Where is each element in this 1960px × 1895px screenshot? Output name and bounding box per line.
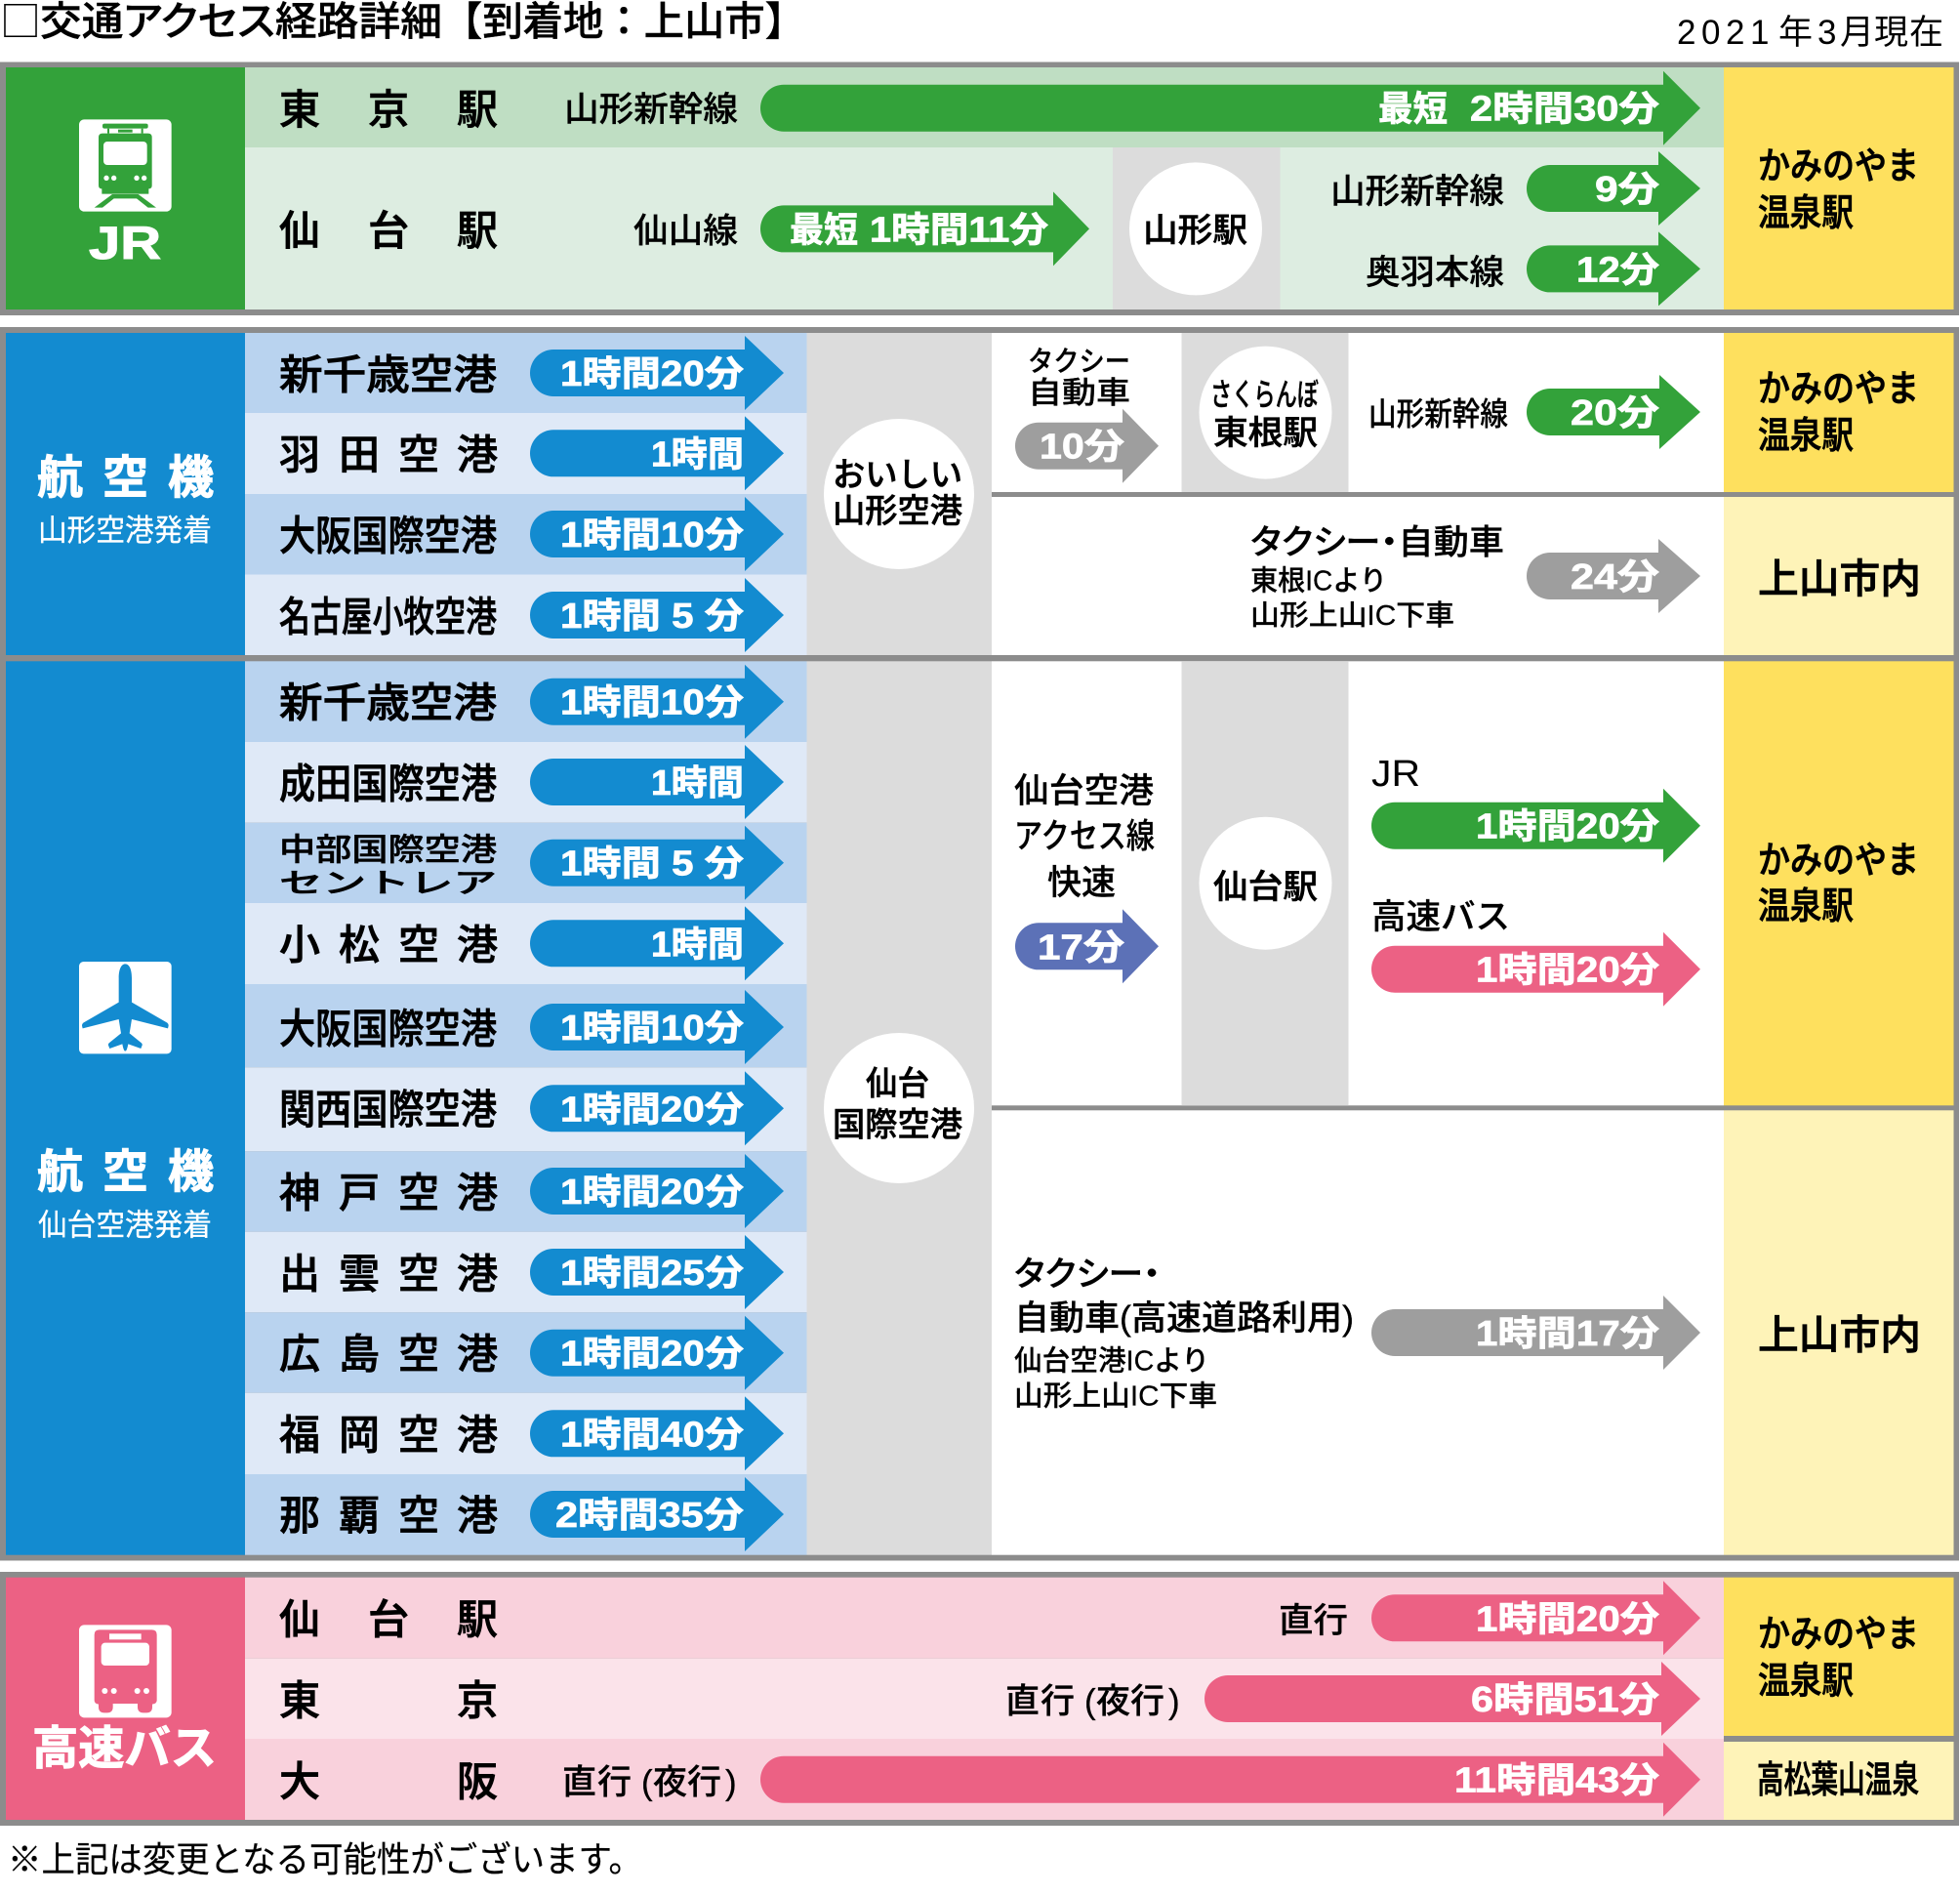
arrow: Tokyo 2h30: 最短 [1378,89,1448,129]
destination: Kaminoyama city: 上山市内 [1758,556,1921,601]
origin: Naha: 那覇空港 [279,1493,498,1539]
destination: Kaminoyama Onsen station [1758,1615,1919,1703]
arrow: 1h10 [530,497,784,571]
line: express bus: 高速バス [1371,898,1510,936]
destination cell: Kaminoyama Onsen [1724,661,1954,1105]
arrow: 12 min: 12分 [1576,249,1659,289]
arrow: 9 min: 9分 [1595,169,1659,209]
line: Senzan: 仙山線 [633,213,738,250]
destination: Kaminoyama Onsen station [1758,369,1919,457]
arrow: 1h40 [530,1396,784,1470]
arrow: 1h05: 1時間 5 分 [560,844,744,884]
arrow: 1h40: 1時間40分 [560,1414,744,1454]
arrow: 1h05 [530,578,784,652]
Yamagata station column [1113,147,1281,309]
arrow: 1h20: 1時間20分 [560,1172,744,1212]
service: direct overnight: 直行(夜行) [562,1763,737,1802]
arrow: 1h20 [530,1071,784,1145]
destination cell: Kaminoyama city [1724,497,1954,655]
origin: Sendai station: 仙台駅 [279,1597,498,1642]
origin: Chubu Centrair: セントレア [279,868,497,898]
arrow: 10 min [1015,409,1159,483]
arrow: 17 min: 17分 [1038,927,1124,967]
hub: Sakuranbo-Higashine station: さくらんぼ [1210,377,1319,412]
JR category block [6,67,245,309]
arrow: 1h17 [1371,1296,1700,1370]
arrow: Tokyo 2h30: 2時間30分 [1470,89,1659,129]
destination: Kaminoyama Onsen station [1758,841,1919,927]
destination: Kaminoyama Onsen station: 温泉駅 [1758,1662,1854,1703]
heading: air via Sendai: 航空機 [37,1146,214,1197]
row: Sendai [245,1578,1724,1659]
destination: Kaminoyama Onsen station: 温泉駅 [1758,416,1854,457]
arrow: 1h10: 1時間10分 [560,682,744,722]
destination cell: Kaminoyama Onsen [1724,1578,1954,1736]
route: taxi expressway [1014,1256,1354,1412]
row: Tokyo station [245,67,1724,147]
bus category block [6,1578,245,1820]
hub: Sakuranbo-Higashine station [1199,347,1331,479]
origin: Izumo: 出雲空港 [279,1252,498,1297]
hub: Sendai international airport: 国際空港 [833,1107,962,1144]
line: Yamagata Shinkansen: 山形新幹線 [1368,396,1508,432]
destination: Kaminoyama Onsen station: かみのやま [1758,369,1919,410]
hub: Sendai station: 仙台駅 [1213,869,1318,906]
row: Sendai station [245,147,1724,309]
hub: Oishii Yamagata airport: 山形空港 [833,493,962,530]
arrow: 1h20 [530,1316,784,1390]
destination cell [1724,67,1954,309]
route: taxi via Higashine IC: 山形上山IC下車 [1250,599,1454,632]
arrow: 1h20: 1時間20分 [560,353,744,393]
arrow: 1h [530,416,784,490]
arrow: 1h10 [530,665,784,739]
route: taxi via Higashine IC: タクシー・自動車 [1250,523,1504,562]
origin: Osaka: 大阪 [279,1759,498,1804]
destination: Kaminoyama Onsen station: かみのやま [1758,1615,1919,1656]
hub: Yamagata station [1129,162,1262,295]
origin: Tokyo: 東京 [279,1677,498,1724]
origin: New Chitose: 新千歳空港 [279,680,497,726]
arrow: Sendai 1h11: 1時間11分 [870,209,1048,249]
arrow: JR 1h20 [1371,789,1700,863]
arrow: 1h10: 1時間10分 [560,515,744,555]
hub: Sendai station [1199,817,1331,950]
row: Tokyo [245,1659,1724,1739]
arrow: 1h20: 1時間20分 [1476,1598,1659,1638]
origin: Kobe: 神戸空港 [279,1170,498,1216]
arrow: bus 1h20: 1時間20分 [1476,950,1659,990]
service: direct: 直行 [1279,1602,1348,1640]
route: taxi expressway: 仙台空港ICより [1014,1345,1209,1377]
route: Sendai airport access line: 仙台空港 [1014,772,1154,810]
hub: Sakuranbo-Higashine station: 東根駅 [1213,415,1318,452]
arrow: Sendai 1h11 [760,191,1089,266]
origin: Kansai: 関西国際空港 [279,1087,497,1133]
arrow: 24 min [1527,539,1700,613]
heading: air via Yamagata: 山形空港発着 [38,514,212,548]
route: taxi via Higashine IC [1250,523,1504,632]
route: Sendai airport access line: アクセス線 [1014,818,1155,855]
panel: JR [0,62,1959,315]
route: taxi or car: 自動車 [1028,376,1130,410]
hub: Sendai international airport [824,1033,974,1183]
destination cell: Kaminoyama city [1724,1110,1954,1555]
origin: Nagoya Komaki: 名古屋小牧空港 [279,594,497,640]
destination: Kaminoyama Onsen station: かみのやま [1758,841,1919,882]
arrow: 2h35 [530,1477,784,1551]
hub: Yamagata station: 山形駅 [1143,213,1247,250]
arrow: 1h: 1時間 [651,762,744,803]
arrow: bus 1h20 [1371,932,1700,1007]
arrow: 1h: 1時間 [651,433,744,474]
arrow: 2h35: 2時間35分 [555,1495,744,1535]
route: taxi via Higashine IC: 東根ICより [1250,564,1387,597]
arrow: JR 1h20: 1時間20分 [1476,806,1659,846]
origin: Sendai station: 仙台駅 [279,208,498,254]
origin: Komatsu: 小松空港 [279,922,498,968]
title: 交通アクセス経路詳細 [40,0,442,44]
arrow: 1h17: 1時間17分 [1476,1313,1659,1353]
hub: Sendai international airport: 仙台 [866,1066,929,1103]
origin: Hiroshima: 広島空港 [279,1332,498,1377]
arrow: 1h10: 1時間10分 [560,1008,744,1048]
arrow: 12 min [1527,231,1700,306]
destination: Kaminoyama Onsen station: かみのやま [1758,146,1919,187]
arrow: 11h43 [760,1743,1700,1817]
panel: air and Yamagata/Sendai airports [0,327,1959,1560]
route: taxi expressway: 山形上山IC下車 [1014,1380,1217,1412]
origin: Chubu Centrair [279,832,497,898]
destination cell: Takamatsu Hayama Onsen [1724,1742,1954,1820]
arrow: 1h20 [530,336,784,410]
arrow: 1h20 [530,1154,784,1228]
arrow: Sendai 1h11: 最短 [790,209,858,249]
arrow: Tokyo 2h30 [760,71,1700,145]
hub: Oishii Yamagata airport [824,419,974,569]
arrow: 1h05: 1時間 5 分 [560,596,744,636]
JR label: JR [89,217,161,268]
transfer column: Sakuranbo-Higashine [1181,333,1349,492]
heading: air via Sendai: 仙台空港発着 [38,1209,212,1242]
origin: New Chitose: 新千歳空港 [279,351,497,398]
icon: airplane [79,962,172,1053]
route: taxi or car: タクシー [1028,347,1130,378]
destination: Kaminoyama city: 上山市内 [1758,1312,1921,1357]
arrow: 11h43: 11時間43分 [1454,1760,1659,1800]
arrow: 1h20: 1時間20分 [560,1089,744,1129]
express bus label: 高速バス [32,1722,217,1774]
destination: Kaminoyama Onsen station: 温泉駅 [1758,193,1854,234]
arrow: 1h25: 1時間25分 [560,1253,744,1293]
Yamagata airport category block [6,333,245,655]
line: Yamagata Shinkansen: 山形新幹線 [1330,173,1504,211]
origin: Haneda: 羽田空港 [279,432,498,478]
arrow: 17 min [1015,909,1159,983]
arrow: 6h51: 6時間51分 [1471,1679,1659,1719]
arrow: 20 min [1527,375,1700,449]
footnote: ※上記は変更となる可能性がございます。 [8,1839,642,1879]
line: Yamagata Shinkansen: 山形新幹線 [564,91,738,129]
service: direct overnight: 直行(夜行) [1005,1683,1180,1720]
arrow: 20 min: 20分 [1571,392,1659,433]
origin: Fukuoka: 福岡空港 [279,1412,498,1459]
arrow: 1h10 [530,990,784,1064]
panel: express bus [0,1572,1959,1826]
route: Sendai airport access line: 快速 [1047,864,1116,902]
arrow: 9 min [1527,151,1700,226]
heading: air via Yamagata: 航空機 [37,451,214,504]
line: JR: JR [1371,754,1420,795]
destination: Kaminoyama Onsen station: 温泉駅 [1758,886,1854,927]
origin: Narita: 成田国際空港 [279,762,497,806]
arrow: 6h51 [1205,1662,1700,1736]
origin: Osaka: 大阪国際空港 [279,514,497,558]
arrow: 1h05 [530,826,784,900]
destination: Kaminoyama Onsen station [1758,146,1919,234]
icon: bus [79,1625,172,1717]
arrow: 10 min: 10分 [1040,427,1124,467]
arrow: 1h20 [1371,1581,1700,1655]
hub: Oishii Yamagata airport: おいしい [833,457,962,494]
airport hub columns [806,333,992,1555]
airport rows background [245,333,806,1555]
heading: air via Sendai [37,1146,214,1242]
row: Osaka [245,1739,1724,1820]
route: taxi expressway: タクシー・ [1014,1256,1161,1294]
date note: 2021年3月現在 [1677,14,1943,52]
transfer column: Sendai station [1181,661,1349,1105]
route: Sendai airport access line [1014,772,1155,902]
arrow: 1h [530,906,784,980]
Sendai airport category block [6,661,245,1555]
line: Ou main line: 奥羽本線 [1366,254,1504,292]
origin: Tokyo station: 東京駅 [279,87,498,133]
heading: air via Yamagata [37,451,214,548]
title: 【到着地：上山市】 [442,0,805,44]
origin: Chubu Centrair: 中部国際空港 [279,832,497,867]
arrow: 24 min: 24分 [1571,556,1659,597]
arrow: 1h20: 1時間20分 [560,1334,744,1374]
onward routes background [992,333,1724,1555]
destination cell: Kaminoyama Onsen [1724,333,1954,492]
arrow: 1h [530,745,784,819]
route: taxi or car [1028,347,1130,410]
title [0,0,805,49]
arrow: 1h25 [530,1235,784,1309]
icon: train [79,119,172,212]
route: taxi expressway: 自動車(高速道路利用) [1014,1299,1354,1338]
origin: Osaka: 大阪国際空港 [279,1006,497,1052]
arrow: 1h: 1時間 [651,924,744,964]
